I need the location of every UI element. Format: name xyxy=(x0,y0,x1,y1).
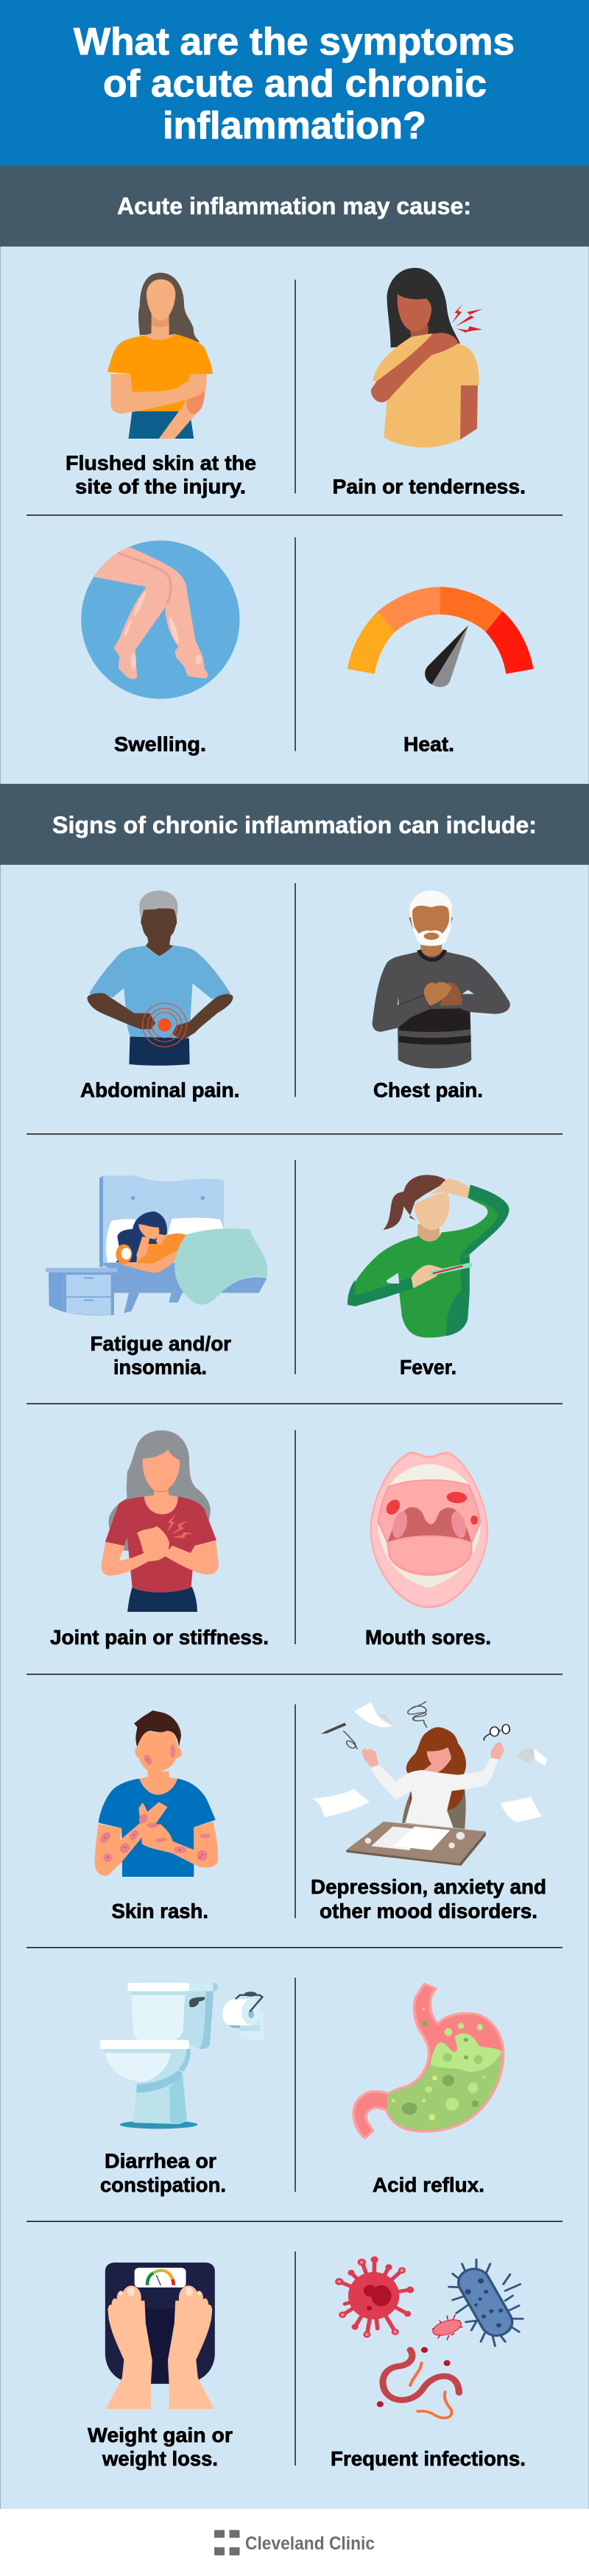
label: fever: Fever. xyxy=(400,1356,456,1379)
label: skin rash: Skin rash. xyxy=(112,1900,208,1922)
icon: abdominal pain man xyxy=(87,891,233,1066)
label: chest pain: Chest pain. xyxy=(373,1079,483,1101)
footer logo: Cleveland Clinic xyxy=(214,2530,375,2555)
section heading: chronic: Signs of chronic inflammation can include: xyxy=(52,812,537,838)
label: frequent infections: Frequent infections. xyxy=(331,2447,526,2470)
icon: germs xyxy=(335,2257,523,2418)
title: of acute and chronic xyxy=(103,63,487,105)
label: depression and anxiety: Depression, anxiety and xyxy=(311,1875,546,1898)
title xyxy=(74,21,515,147)
icon: chest pain man xyxy=(373,891,510,1069)
footer logo: Cleveland Clinic: Cleveland Clinic xyxy=(245,2533,375,2554)
label: mouth sores: Mouth sores. xyxy=(365,1626,491,1649)
label: flushed skin: Flushed skin at the xyxy=(66,452,256,474)
title: What are the symptoms xyxy=(74,21,515,63)
icon: stomach with acid reflux xyxy=(353,1984,504,2138)
icon: swollen legs xyxy=(81,540,240,699)
icon: shoulder pain woman xyxy=(371,268,483,447)
label: joint pain: Joint pain or stiffness. xyxy=(50,1626,269,1649)
label: flushed skin: site of the injury. xyxy=(75,475,246,498)
icon: mouth sores xyxy=(370,1451,488,1608)
section heading: acute xyxy=(0,166,589,247)
label: fatigue and insomnia: insomnia. xyxy=(113,1356,207,1379)
label: flushed skin xyxy=(66,452,256,498)
label: diarrhea or constipation: constipation. xyxy=(100,2173,226,2196)
label: diarrhea or constipation xyxy=(100,2149,226,2196)
icon: flushed skin woman xyxy=(107,273,213,439)
label: weight gain or loss xyxy=(88,2424,233,2470)
section heading: chronic xyxy=(0,784,589,865)
label: weight gain or loss: Weight gain or xyxy=(88,2424,233,2446)
panel: acute inflammation xyxy=(0,247,589,784)
label: diarrhea or constipation: Diarrhea or xyxy=(105,2149,216,2173)
label: swelling: Swelling. xyxy=(114,733,206,755)
icon: woman awake in bed xyxy=(46,1175,267,1315)
label: abdominal pain: Abdominal pain. xyxy=(80,1079,240,1101)
panel: chronic inflammation xyxy=(0,865,589,2509)
icon: joint pain woman xyxy=(102,1430,219,1612)
icon: heat gauge xyxy=(348,587,533,687)
icon: overwhelmed woman at desk xyxy=(312,1702,547,1866)
label: depression and anxiety xyxy=(311,1875,546,1922)
label: pain or tenderness: Pain or tenderness. xyxy=(333,475,526,498)
icon: skin rash man xyxy=(95,1710,218,1877)
label: fatigue and insomnia: Fatigue and/or xyxy=(90,1332,231,1355)
section heading: acute: Acute inflammation may cause: xyxy=(117,193,471,219)
icon: feet on bathroom scale xyxy=(105,2262,215,2409)
label: heat: Heat. xyxy=(403,733,454,755)
header banner xyxy=(0,0,589,166)
label: acid reflux: Acid reflux. xyxy=(373,2173,484,2196)
label: weight gain or loss: weight loss. xyxy=(102,2447,218,2470)
label: depression and anxiety: other mood disorders. xyxy=(320,1900,537,1922)
icon: fever woman xyxy=(348,1175,509,1337)
icon: toilet and paper roll xyxy=(100,1983,264,2129)
title: inflammation? xyxy=(163,105,426,147)
label: fatigue and insomnia xyxy=(90,1332,231,1379)
